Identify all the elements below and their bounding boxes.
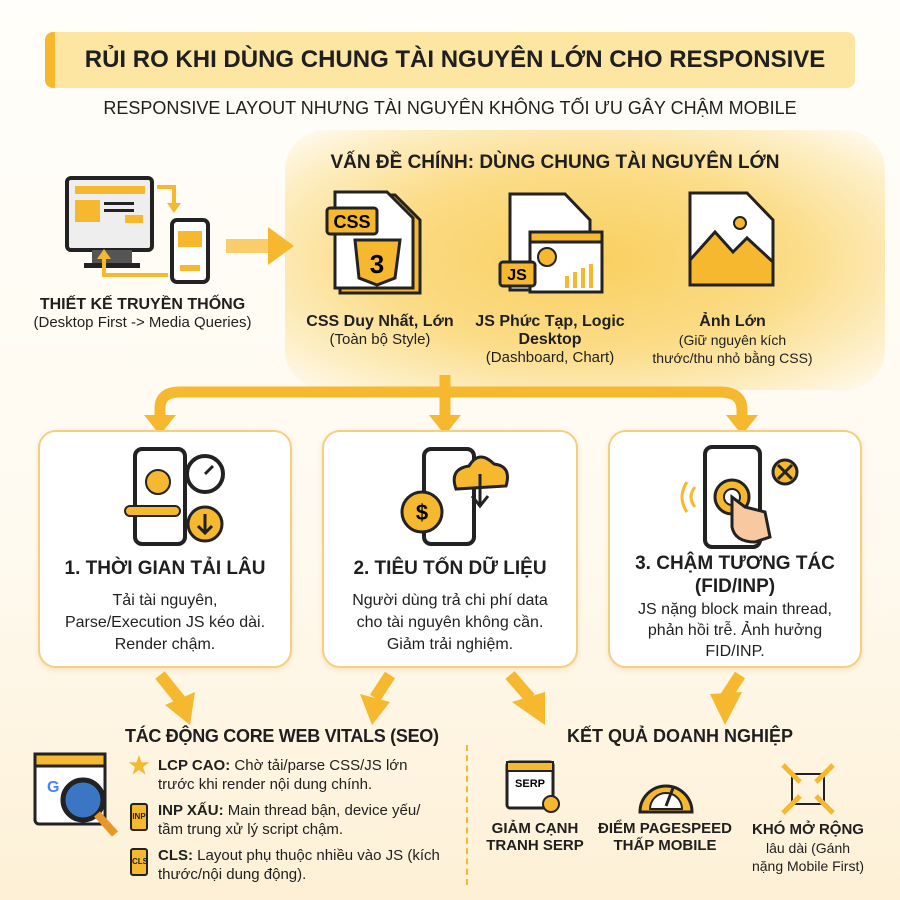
label: pagespeed: ĐIỂM PAGESPEED THẤP MOBILE [598, 820, 732, 854]
icon: seo magnifier: G [47, 779, 59, 796]
card text: Giảm trải nghiệm. [387, 636, 513, 653]
bullet: LCP: LCP CAO: Chờ tải/parse CSS/JS lớn trước khi render nội dung chính. [158, 757, 407, 793]
text: traditional design: (Desktop First -> Media Queries) [34, 314, 251, 331]
card text: Người dùng trả chi phí data [352, 592, 548, 609]
heading: main problem: VẤN ĐỀ CHÍNH: DÙNG CHUNG TÀI NGUYÊN LỚN [330, 152, 780, 173]
heading: business results: KẾT QUẢ DOANH NGHIỆP [567, 726, 793, 746]
card text: Parse/Execution JS kéo dài. [65, 614, 265, 631]
icon: phone money cloud [400, 447, 509, 546]
label: js: (Dashboard, Chart) [486, 349, 614, 366]
card title: 3. CHẬM TƯƠNG TÁC [635, 553, 835, 574]
glow background [285, 130, 885, 390]
icon: css file: 3 [370, 249, 384, 279]
card text [352, 592, 548, 653]
label: css: (Toàn bộ Style) [330, 331, 430, 348]
card title: 2. TIÊU TỐN DỮ LIỆU [353, 558, 547, 579]
card title: 1. THỜI GIAN TẢI LÂU [65, 558, 265, 579]
card text: Tải tài nguyên, [113, 592, 217, 609]
icon: phone touch [680, 445, 798, 549]
bullet: LCP: ★ [128, 753, 150, 778]
card 2 [322, 430, 578, 668]
label: image: Ảnh Lớn [699, 313, 766, 330]
arrow: to main problem [226, 227, 294, 265]
icon: gauge [638, 784, 694, 814]
card text: FID/INP. [705, 643, 765, 660]
icon: js file: JS [507, 267, 527, 284]
card text: Render chậm. [115, 636, 215, 653]
title [45, 32, 855, 88]
icon: seo magnifier [34, 752, 118, 837]
text: traditional design [34, 294, 251, 331]
label: serp: GIẢM CẠNH TRANH SERP [486, 820, 584, 854]
card text [638, 601, 832, 660]
label: css: CSS Duy Nhất, Lớn [306, 313, 454, 330]
subtitle: RESPONSIVE LAYOUT NHƯNG TÀI NGUYÊN KHÔNG TỐI ƯU GÂY CHẬM MOBILE [103, 98, 797, 118]
card title: (FID/INP) [695, 576, 775, 597]
label: scaling: lâu dài (Gánh [766, 840, 850, 856]
icon: js file [498, 192, 604, 294]
bullets: vitals [128, 753, 440, 883]
icon: image file [688, 192, 774, 286]
label: image: thước/thu nhỏ bằng CSS) [652, 350, 813, 366]
label: scaling: KHÓ MỞ RỘNG [752, 821, 864, 838]
icon: phone money cloud: $ [416, 500, 428, 525]
bullet: INP: INP XẤU: Main thread bận, device yếu/ tầm trung xử lý script chậm. [158, 802, 420, 838]
label: image: (Giữ nguyên kích [679, 332, 786, 348]
label: scaling [752, 820, 864, 874]
bullet: CLS: CLS [132, 857, 148, 866]
bullet: INP: INP [132, 812, 146, 821]
icon: desktop and mobile [65, 176, 210, 284]
label: js: JS Phức Tạp, Logic Desktop [475, 313, 625, 348]
label: js [475, 313, 625, 366]
card 1 [38, 430, 292, 668]
card 3 [608, 430, 862, 668]
icon: css file [326, 190, 422, 294]
label: css [306, 313, 454, 348]
heading: core web vitals: TÁC ĐỘNG CORE WEB VITALS (SEO) [125, 726, 439, 746]
icon: serp: SERP [515, 778, 545, 790]
label: scaling: nặng Mobile First) [752, 858, 864, 874]
card text: cho tài nguyên không cần. [357, 614, 543, 631]
title: RỦI RO KHI DÙNG CHUNG TÀI NGUYÊN LỚN CHO RESPONSIVE [85, 46, 825, 73]
icon: css file: CSS [333, 212, 371, 232]
arrows: to bottom [155, 671, 745, 725]
card title [635, 552, 835, 597]
label: image [652, 312, 813, 366]
icon: serp [506, 760, 560, 813]
bullet: CLS: CLS: Layout phụ thuộc nhiều vào JS (kích thước/nội dung động). [158, 847, 440, 883]
card text: phản hồi trễ. Ảnh hưởng [648, 622, 822, 639]
arrows: branching [144, 375, 758, 430]
card text [65, 592, 265, 653]
icon: expand arrows [781, 763, 835, 815]
icon: phone timer [124, 447, 225, 546]
card text: JS nặng block main thread, [638, 601, 832, 618]
text: traditional design: THIẾT KẾ TRUYỀN THỐNG [40, 296, 245, 313]
